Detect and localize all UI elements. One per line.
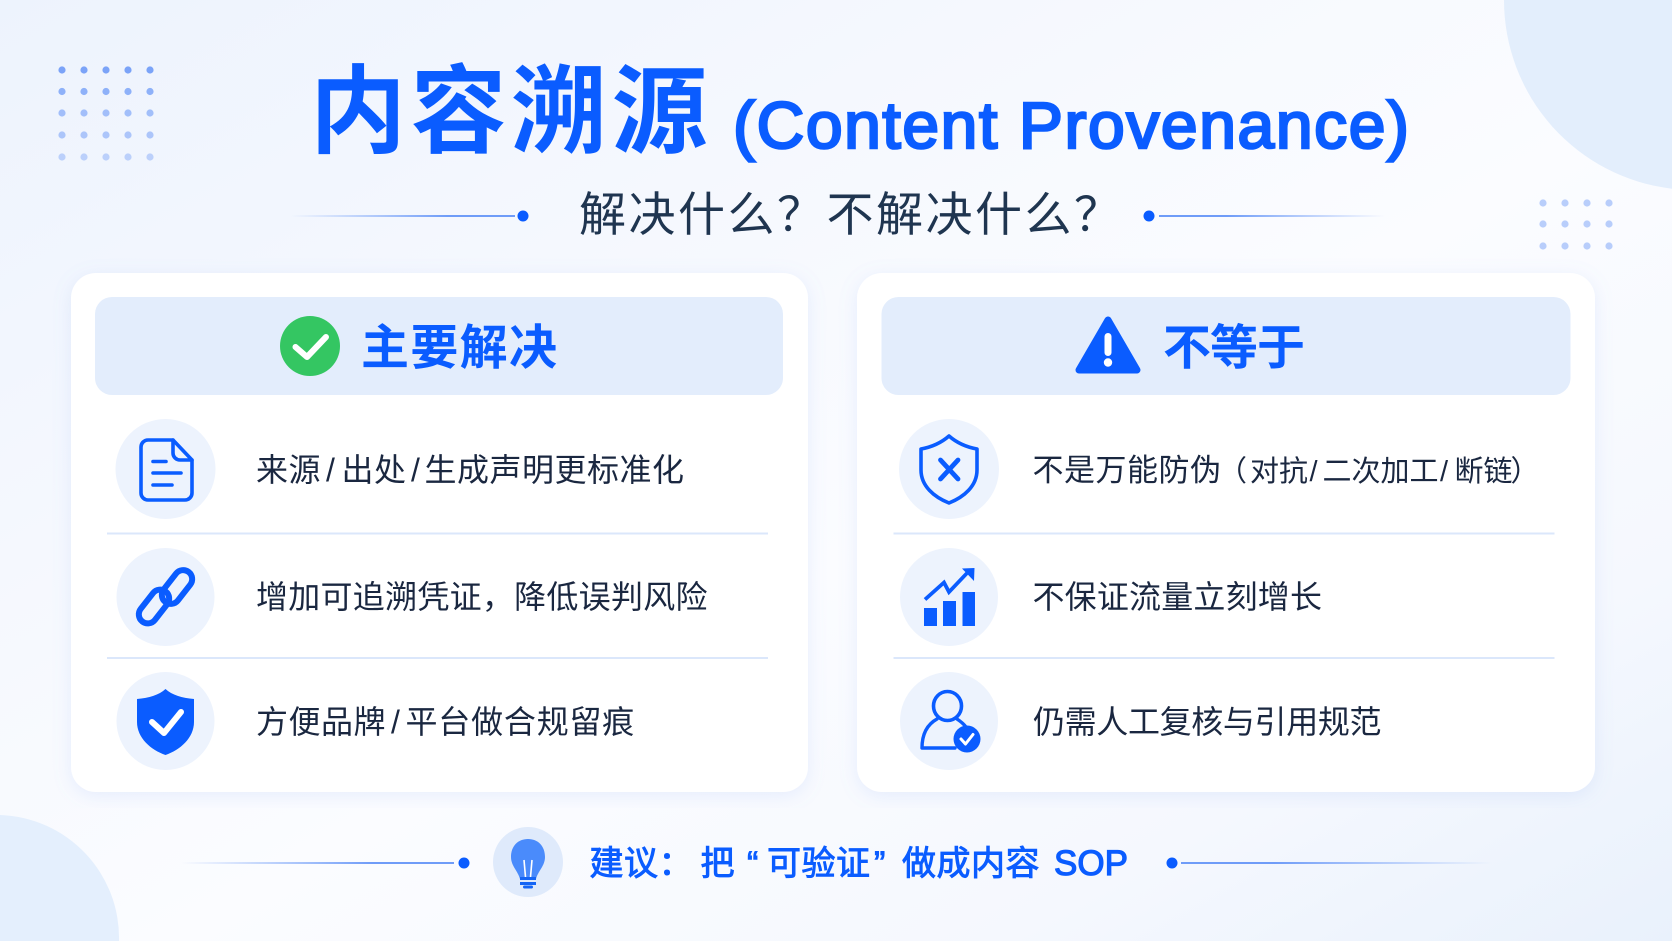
icon: shield check — [137, 689, 194, 755]
item: not universal anti-forgery — [899, 419, 1540, 519]
icon: warning triangle — [1079, 320, 1137, 370]
dot grid: top left — [58, 66, 154, 161]
item: not universal anti-forgery: （ — [1218, 456, 1247, 488]
footer recommendation: SOP — [1054, 844, 1128, 883]
footer recommendation: 做成内容 — [902, 845, 1040, 883]
icon: green check — [280, 316, 340, 376]
icon: chain link — [135, 566, 196, 627]
item: compliance trail — [116, 672, 635, 770]
panel heading: is not: 不等于 — [1163, 322, 1305, 375]
icon: person with check — [922, 692, 980, 752]
icon: shield cross — [921, 436, 977, 503]
footer recommendation: 建议： — [590, 845, 693, 883]
item: traceable evidence — [116, 548, 708, 646]
item: standardised declarations — [116, 419, 685, 519]
footer recommendation: 可验证 — [767, 845, 870, 883]
item: not universal anti-forgery: 二次加工 — [1322, 455, 1439, 488]
title — [310, 59, 1409, 166]
panel: is not — [857, 273, 1595, 792]
item: standardised declarations: / — [326, 452, 335, 488]
icon: growth chart — [924, 568, 975, 626]
item: human review needed — [900, 672, 1382, 770]
item: not universal anti-forgery: 断链 — [1454, 455, 1513, 488]
item: standardised declarations: / — [411, 452, 420, 488]
item: not universal anti-forgery: / — [1440, 456, 1449, 488]
panel: mainly solves — [71, 273, 808, 792]
subtitle with rules: 解决什么？不解决什么？ — [579, 188, 1124, 241]
panel heading: mainly solves — [95, 297, 783, 395]
item: not universal anti-forgery: / — [1310, 456, 1318, 488]
title: (Content Provenance) — [733, 88, 1409, 162]
icon: light bulb — [493, 827, 563, 897]
item: compliance trail: / — [391, 704, 400, 740]
item: compliance trail: 方便品牌 — [256, 704, 386, 740]
item: standardised declarations: 生成声明更标准化 — [424, 452, 685, 488]
title: 内容溯源 — [310, 59, 712, 166]
panel heading: is not — [882, 297, 1570, 395]
icon: document — [141, 440, 192, 500]
item: no guaranteed growth — [900, 548, 1322, 646]
footer recommendation — [181, 827, 1492, 897]
footer recommendation: “ — [747, 845, 759, 883]
item: no guaranteed growth: 不保证流量立刻增长 — [1032, 579, 1322, 615]
item: standardised declarations: 出处 — [342, 452, 407, 488]
item: human review needed: 仍需人工复核与引用规范 — [1033, 704, 1382, 740]
item: traceable evidence: 增加可追溯凭证，降低误判风险 — [256, 579, 708, 615]
footer recommendation: 把 — [700, 845, 735, 883]
item: not universal anti-forgery: ） — [1510, 456, 1540, 488]
item: not universal anti-forgery: 对抗 — [1250, 455, 1308, 488]
item: not universal anti-forgery: 不是万能防伪 — [1032, 453, 1222, 488]
dot grid: top right — [1539, 199, 1613, 250]
subtitle with rules — [290, 188, 1385, 241]
footer recommendation: ” — [874, 845, 886, 883]
panel heading: mainly solves: 主要解决 — [361, 322, 557, 375]
item: compliance trail: 平台做合规留痕 — [406, 704, 635, 740]
item: standardised declarations: 来源 — [256, 452, 321, 488]
